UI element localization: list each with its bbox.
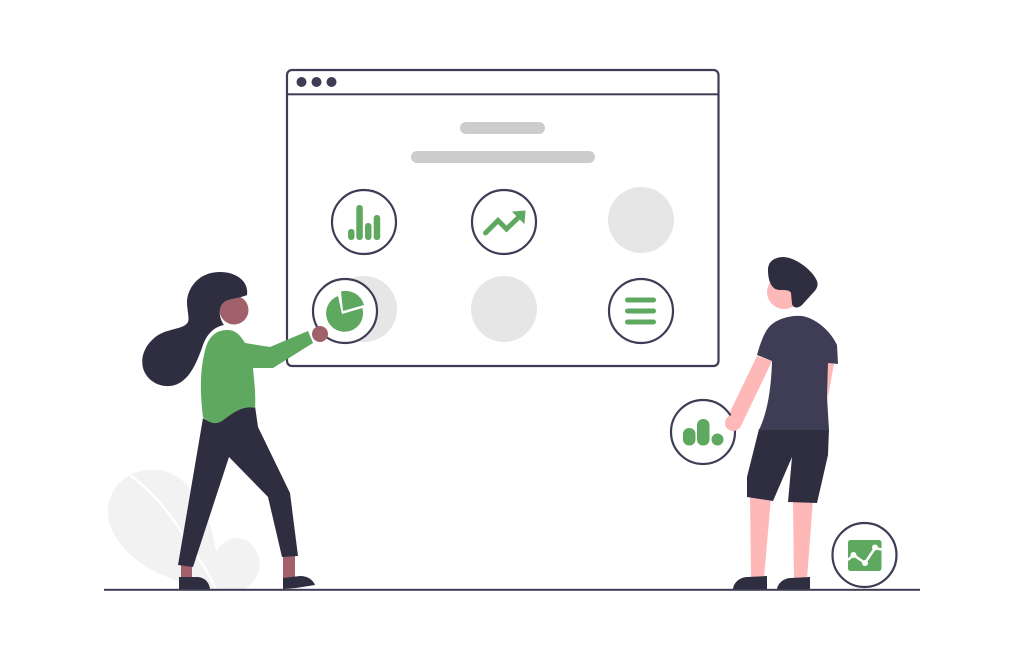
man left arm [726, 356, 772, 428]
placeholder circle [471, 276, 537, 342]
icon: bar chart [332, 190, 396, 254]
man right arm [827, 362, 834, 402]
woman face [220, 296, 248, 324]
woman shoes [179, 576, 315, 589]
icon: trend arrow [472, 190, 536, 254]
woman sweater [201, 330, 313, 423]
icon: small bars in circle [671, 400, 741, 464]
man face [767, 275, 801, 309]
heading placeholder [460, 122, 545, 134]
man hand over circle [725, 415, 741, 431]
man t-shirt [757, 316, 838, 430]
decorative leaves [108, 470, 260, 589]
man shoes [733, 576, 810, 589]
browser window [287, 70, 718, 366]
placeholder circle behind pie [331, 276, 397, 342]
woman figure [142, 272, 328, 589]
icon: menu [609, 279, 673, 343]
man legs [750, 495, 813, 579]
woman hair [142, 272, 247, 386]
man hair [768, 257, 818, 308]
icon: pie chart [313, 279, 377, 343]
man shorts [747, 429, 829, 503]
icon: line chart card [832, 523, 896, 587]
ground line [104, 589, 920, 591]
woman lower legs [181, 554, 295, 579]
subheading placeholder [411, 151, 595, 163]
man figure [726, 257, 838, 589]
window dots [296, 77, 336, 87]
placeholder circle [608, 187, 674, 253]
woman trousers [178, 406, 298, 567]
woman hand [312, 326, 328, 342]
